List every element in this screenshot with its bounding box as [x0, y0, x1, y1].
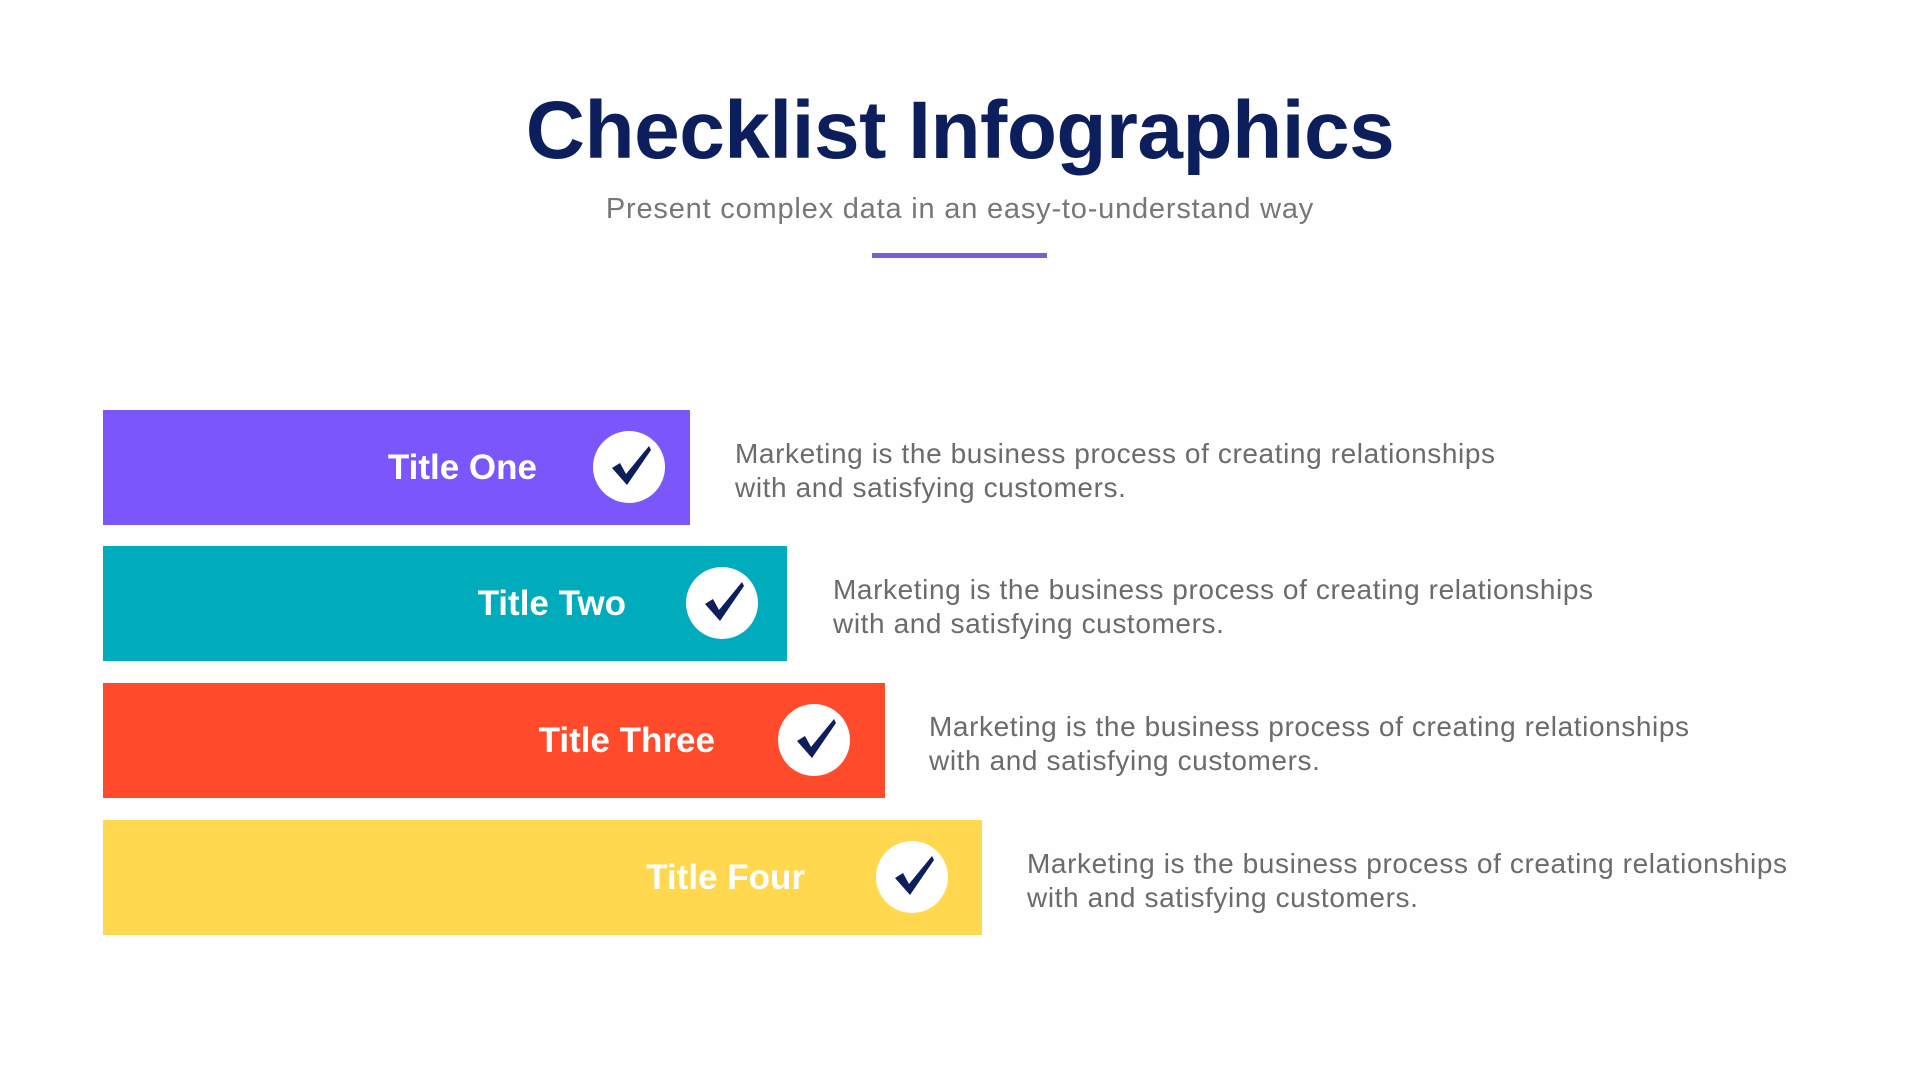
description 3: Marketing is the business process of creating relationships [929, 711, 1690, 742]
description 1 [735, 438, 1496, 503]
description 2 [833, 574, 1594, 639]
icon: check [686, 567, 758, 639]
description 4 [1027, 848, 1788, 913]
bar: title three [103, 683, 885, 798]
icon: check [778, 704, 850, 776]
description 3 [929, 711, 1690, 776]
bar: title one: Title One [388, 448, 537, 487]
accent underline [872, 253, 1047, 258]
description 2: with and satisfying customers. [833, 608, 1224, 639]
icon: check [876, 841, 948, 913]
bar: title four [103, 820, 982, 935]
bar: title one [103, 410, 690, 525]
row 1 [103, 410, 1496, 525]
description 1: Marketing is the business process of creating relationships [735, 438, 1496, 469]
row 2 [103, 546, 1594, 661]
description 4: Marketing is the business process of creating relationships [1027, 848, 1788, 879]
row 4 [103, 820, 1788, 935]
bar: title three: Title Three [539, 721, 715, 760]
icon: check [593, 431, 665, 503]
subtitle: Present complex data in an easy-to-understand way [606, 193, 1314, 225]
bar: title two: Title Two [478, 584, 626, 623]
bar: title four: Title Four [646, 858, 805, 897]
description 4: with and satisfying customers. [1027, 882, 1418, 913]
bar: title two [103, 546, 787, 661]
title: Checklist Infographics [526, 85, 1394, 176]
description 3: with and satisfying customers. [929, 745, 1320, 776]
row 3 [103, 683, 1690, 798]
description 1: with and satisfying customers. [735, 472, 1126, 503]
description 2: Marketing is the business process of creating relationships [833, 574, 1594, 605]
